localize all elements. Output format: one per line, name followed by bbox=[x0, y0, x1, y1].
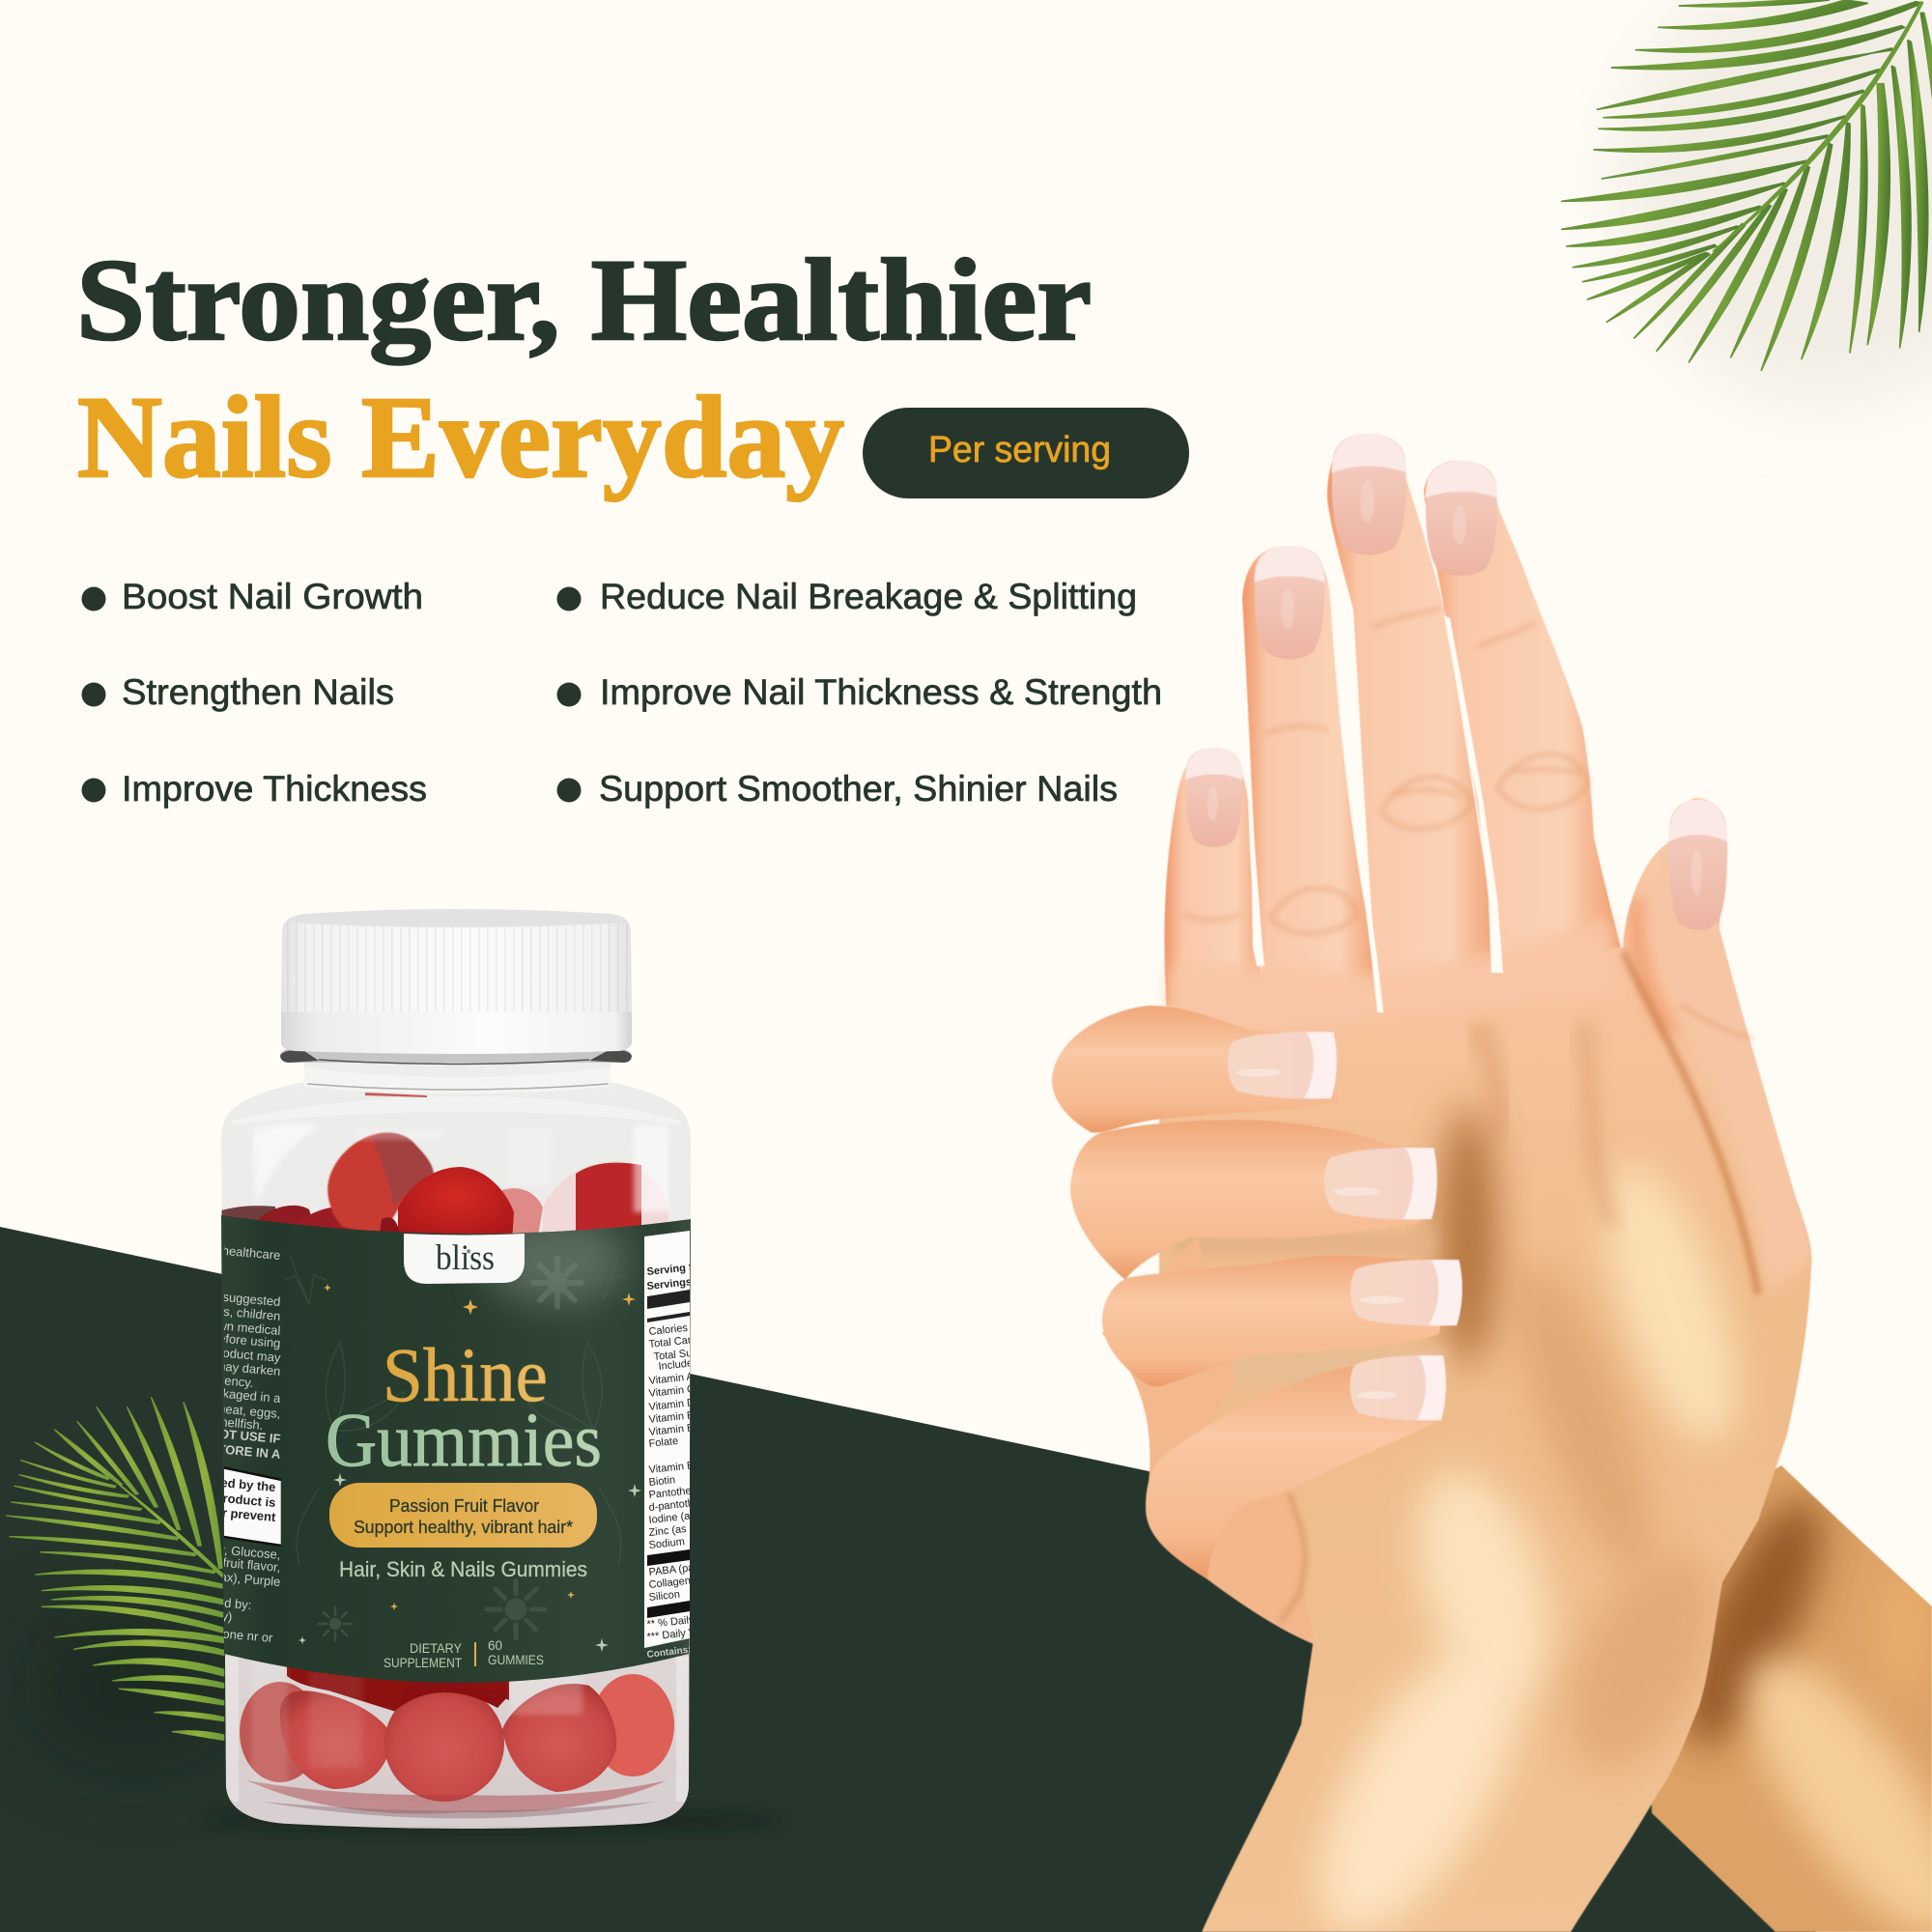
icon: sun top bbox=[533, 1259, 582, 1307]
nutrition facts panel: Vitamin B-6 (as pyr) bbox=[648, 1417, 743, 1438]
benefits list bbox=[81, 577, 1162, 809]
back of main hand bbox=[1159, 798, 1816, 1932]
left side warning text: potency. bbox=[207, 1372, 254, 1390]
left side warning text: this product is bbox=[189, 1488, 276, 1510]
logo tab bbox=[404, 1234, 525, 1284]
benefit: reduce breakage: Reduce Nail Breakage & Splitting bbox=[600, 577, 1137, 616]
nail: index finger bbox=[1426, 461, 1497, 576]
icon: sun small bbox=[319, 1607, 352, 1640]
icon: palm leaf bottom left bbox=[7, 1398, 251, 1773]
middle finger bbox=[1327, 434, 1503, 1024]
left side warning text bbox=[224, 1246, 281, 1642]
dietary supplement: DIETARY bbox=[410, 1641, 462, 1656]
left side warning text: ributed by: bbox=[192, 1593, 252, 1612]
badge: per serving: Per serving bbox=[928, 430, 1111, 470]
product: bottle bbox=[220, 909, 765, 1835]
finger base blend bbox=[1169, 918, 1623, 1043]
left side warning text: (Passion fruit flavor, bbox=[170, 1550, 281, 1575]
flavor pill bbox=[329, 1483, 597, 1548]
title line one: Stronger, Healthier bbox=[76, 236, 1092, 365]
nail: ring finger bbox=[1254, 546, 1324, 659]
glass body bbox=[221, 1061, 691, 1829]
nutrition facts panel: Collagen (peptide) bbox=[648, 1571, 736, 1591]
top gummies bbox=[222, 1132, 668, 1234]
product name: Shine: Shine bbox=[383, 1334, 548, 1418]
left side warning text: OIL. DO NOT USE IF bbox=[159, 1421, 281, 1446]
flavor pill: Passion Fruit Flavor bbox=[389, 1495, 539, 1516]
flavor pill: Support healthy, vibrant hair* bbox=[354, 1517, 573, 1537]
knuckle creases bbox=[1183, 609, 1753, 1038]
benefit: boost nail growth: Boost Nail Growth bbox=[122, 577, 423, 616]
nutrition facts panel: Total Sugars bbox=[653, 1346, 714, 1363]
lower glass reflections bbox=[225, 1657, 690, 1802]
benefit: smoother nails: Support Smoother, Shinier Nails bbox=[599, 769, 1118, 809]
dietary supplement bbox=[384, 1638, 544, 1670]
left side warning text: k, soy, wheat, eggs, bbox=[170, 1397, 281, 1421]
left side warning text: by a healthcare bbox=[194, 1240, 281, 1263]
nutrition facts panel: Biotin bbox=[648, 1474, 676, 1489]
label highlight bbox=[483, 1217, 628, 1304]
nutrition facts panel: Silicon bbox=[648, 1589, 681, 1604]
label bbox=[221, 1215, 691, 1683]
curled finger: fourth bbox=[1146, 1355, 1446, 1579]
nutrition facts panel: *** Daily Value (DV) bbox=[646, 1622, 740, 1643]
nutrition facts panel: Vitamin C (as ascorbic) bbox=[648, 1377, 758, 1400]
thumb pad bbox=[1146, 1449, 1314, 1644]
dark green diagonal panel bbox=[0, 1227, 1816, 1932]
ring finger bbox=[1242, 546, 1381, 1034]
benefit: improve thickness: Improve Thickness bbox=[122, 769, 427, 809]
illustration: hands bbox=[1052, 434, 1932, 1932]
pinky finger bbox=[1165, 748, 1267, 1014]
nutrition facts panel: Vitamin D (as chole) bbox=[648, 1392, 745, 1413]
nutrition facts panel: Serving Size 3 Gummies bbox=[646, 1254, 770, 1278]
dietary supplement: SUPPLEMENT bbox=[384, 1656, 462, 1670]
nutrition facts panel: Total Carbohydrate bbox=[648, 1329, 739, 1350]
left side warning text: ocean shellfish. bbox=[176, 1410, 264, 1433]
nutrition facts panel: Iodine (as potassium) bbox=[648, 1504, 751, 1526]
nail: middle finger bbox=[1332, 434, 1406, 554]
left side warning text: this product may bbox=[188, 1343, 282, 1365]
left side warning text: own may darken bbox=[188, 1356, 281, 1378]
left side warning text: uba wax), Purple bbox=[186, 1567, 281, 1589]
left side warning text: ny) bbox=[214, 1607, 233, 1624]
logo tab: * bbox=[466, 1246, 471, 1261]
nutrition facts panel: PABA (para-amino) bbox=[648, 1557, 740, 1578]
left side warning text: valuated by the bbox=[184, 1472, 276, 1494]
nutrition facts panel: Includes 4 g Added bbox=[658, 1351, 749, 1373]
back forearm bbox=[1642, 1465, 1932, 1932]
nutrition facts panel bbox=[644, 1231, 690, 1648]
badge: per serving bbox=[863, 408, 1189, 498]
nutrition facts panel: d-pantothenate) bbox=[648, 1494, 724, 1514]
cap bbox=[281, 909, 632, 1054]
thumb crease shadow bbox=[1280, 1492, 1305, 1623]
title line two: Nails Everyday bbox=[77, 373, 844, 502]
title bbox=[76, 236, 1092, 502]
nutrition facts panel: Servings Per Container bbox=[646, 1268, 765, 1293]
web of lower fingers bbox=[1102, 1236, 1236, 1517]
icon: sun lower bbox=[487, 1580, 545, 1638]
nutrition facts panel: Sodium bbox=[648, 1536, 685, 1551]
benefit: improve nail thickness: Improve Nail Thickness & Strength bbox=[600, 672, 1162, 712]
nutrition facts panel: Vitamin E (as d-alpha) bbox=[648, 1404, 753, 1426]
curled finger: third bbox=[1102, 1255, 1463, 1386]
nutrition facts panel: Zinc (as zinc citrate) bbox=[648, 1518, 744, 1539]
label leaf decoration bbox=[285, 1256, 628, 1565]
left side warning text: cure or prevent bbox=[184, 1502, 277, 1524]
dietary supplement: 60 bbox=[488, 1638, 502, 1653]
gaps between fingers bbox=[1251, 615, 1503, 1012]
left side warning text: cian before using bbox=[185, 1327, 281, 1350]
curled finger: top bbox=[1052, 1006, 1338, 1133]
allergen note: Contains: Palm Oil bbox=[646, 1639, 733, 1661]
nail: pinky bbox=[1185, 748, 1242, 847]
nutrition facts panel: Pantothenic Acid (as bbox=[648, 1480, 747, 1501]
left side warning text: ROKING. STORE IN A bbox=[152, 1435, 282, 1462]
curled finger: second bbox=[1070, 1120, 1437, 1280]
upper glass reflections bbox=[255, 1083, 668, 1216]
nutrition facts panel: Vitamin B-12 (as cy) bbox=[648, 1455, 745, 1476]
product name: Gummies: Gummies bbox=[326, 1399, 602, 1483]
left side warning text: known medical bbox=[197, 1317, 281, 1338]
icon: palm leaf top right bbox=[1562, 0, 1932, 401]
nutrition facts panel: Folate bbox=[648, 1435, 679, 1450]
left side warning text: mothers, children bbox=[184, 1300, 281, 1323]
dietary supplement: GUMMIES bbox=[488, 1653, 544, 1667]
neck ring bbox=[280, 1049, 632, 1065]
left side warning text: xceed the suggested bbox=[164, 1285, 281, 1309]
nutrition facts panel: ** % Daily Value (%) bbox=[646, 1609, 743, 1631]
subtitle: Hair, Skin & Nails Gummies bbox=[339, 1557, 587, 1581]
nutrition facts panel: Vitamin A (as retinyl) bbox=[648, 1366, 746, 1387]
benefit: strengthen nails: Strengthen Nails bbox=[122, 672, 394, 712]
nutrition facts panel: Calories bbox=[648, 1322, 689, 1338]
left side warning text: ug. Sugar, Glucose, bbox=[170, 1538, 281, 1562]
bottom gummies bbox=[224, 1652, 688, 1826]
left side warning text: nd packaged in a bbox=[185, 1382, 282, 1406]
nail: thumb bbox=[1668, 800, 1727, 930]
index finger bbox=[1424, 461, 1623, 985]
bottle shadow bbox=[203, 1809, 782, 1833]
logo tab: bliss bbox=[436, 1238, 495, 1278]
sparkles bbox=[298, 1284, 641, 1652]
left side warning text: and phone nr or bbox=[184, 1623, 274, 1645]
